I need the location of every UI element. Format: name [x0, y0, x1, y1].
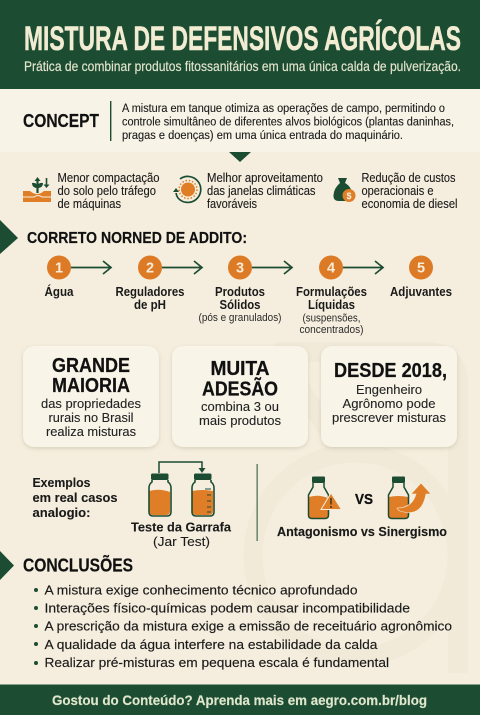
heading: order of addition: CORRETO NORNED DE ADDITO: [27, 230, 247, 247]
caption: Antagonismo vs Sinergismo [277, 524, 447, 539]
card: desde 2018 [321, 346, 457, 447]
benefit text: favoráveis [207, 196, 257, 211]
benefit text: das janelas climáticas [207, 183, 316, 198]
text: examples label: em real casos [32, 491, 118, 505]
list: conclusions [34, 582, 452, 670]
panel: concept [0, 89, 480, 152]
card: grande maioria: realiza misturas [46, 424, 136, 439]
step circles [47, 256, 433, 280]
icon: antagonism vs synergism [277, 476, 447, 539]
icon: jar test: (Jar Test) [153, 534, 210, 549]
jar two [192, 474, 214, 516]
step notes [198, 312, 364, 336]
list: conclusions: A prescrição da mistura exige a emissão de receituário agronômico [44, 618, 452, 634]
card: muita adesão: combina 3 ou [201, 399, 279, 414]
card: desde 2018: Engenheiro [356, 382, 422, 397]
list: conclusions: Realizar pré-misturas em pequena escala é fundamental [44, 655, 389, 670]
card: desde 2018: DESDE 2018, [334, 360, 447, 382]
card: grande maioria: GRANDE [52, 355, 130, 377]
step numbers [55, 260, 425, 276]
icon: money bag: $ [346, 191, 352, 201]
card: grande maioria: MAIORIA [52, 375, 130, 397]
card: muita adesão [172, 346, 308, 447]
text: examples label: analogio: [32, 506, 90, 520]
step labels [44, 284, 452, 312]
icon: jar test [131, 462, 232, 549]
concept text: pragas e doenças) em uma única entrada do maquinário. [122, 128, 403, 142]
jar one [149, 474, 171, 516]
concept text [122, 101, 454, 142]
step numbers: 4 [327, 260, 335, 276]
benefit text: de máquinas [58, 196, 121, 211]
list: conclusions: A qualidade da água interfere na estabilidade da calda [44, 637, 378, 652]
benefit text: do solo pelo tráfego [58, 183, 156, 198]
step numbers: 5 [417, 260, 425, 276]
bottle with warning [308, 476, 342, 518]
benefit text: operacionais e [362, 183, 434, 198]
card: desde 2018: Agrônomo pode [342, 396, 436, 411]
step notes: (pós e granulados) [198, 312, 282, 324]
step flow [44, 256, 452, 336]
benefit text: Redução de custos [362, 170, 456, 185]
arrows [70, 261, 383, 274]
benefit: soil compaction [23, 170, 160, 211]
icon: section marker [0, 551, 14, 580]
step notes: concentrados) [300, 324, 364, 336]
benefit text [58, 170, 160, 211]
step labels: Produtos [215, 284, 265, 299]
text: examples label: Exemplos [32, 476, 91, 490]
card: desde 2018: prescrever misturas [332, 410, 446, 425]
text: examples label [32, 476, 118, 520]
list: conclusions: A mistura exige conhecimento técnico aprofundado [44, 582, 358, 598]
step labels: Formulações [296, 284, 367, 299]
step numbers: 1 [55, 260, 63, 276]
card: grande maioria: das propriedades [41, 396, 141, 411]
footer [0, 684, 480, 715]
step labels: Adjuvantes [390, 284, 452, 299]
bottle with rising arrow [388, 476, 431, 518]
icon: section marker [0, 220, 18, 254]
arrow between jars [159, 462, 202, 473]
benefit: climate windows [173, 170, 323, 211]
heading: conclusions: CONCLUSÕES [23, 554, 133, 576]
vs label: VS [355, 491, 373, 508]
step labels: Líquidas [308, 297, 355, 312]
concept heading: CONCEPT [23, 111, 99, 131]
benefit text: Melhor aproveitamento [207, 170, 323, 185]
icon: down triangle [229, 152, 251, 162]
step labels: Reguladores [116, 284, 184, 299]
concept text: A mistura em tanque otimiza as operações de campo, permitindo o [122, 101, 445, 115]
step numbers: 3 [236, 260, 244, 276]
footer: Gostou do Conteúdo? Aprenda mais em aegro.com.br/blog [52, 692, 427, 708]
benefit text [362, 170, 458, 211]
icon: soil and plant [23, 177, 51, 202]
step notes: (suspensões, [302, 312, 360, 324]
card: muita adesão: mais produtos [199, 413, 281, 428]
card: grande maioria [23, 346, 159, 447]
step labels: Sólidos [220, 297, 260, 312]
header banner [0, 0, 480, 89]
benefit text: economia de diesel [362, 196, 458, 211]
card: grande maioria: rurais no Brasil [48, 410, 134, 425]
benefit: cost reduction [333, 170, 458, 211]
step labels: Água [44, 284, 74, 299]
step labels: de pH [134, 297, 166, 312]
icon: sun cycle [173, 176, 201, 202]
benefit text [207, 170, 323, 211]
caption: Teste da Garrafa [131, 520, 232, 534]
step numbers: 2 [146, 260, 154, 276]
card: muita adesão: ADESÃO [202, 378, 278, 400]
card: muita adesão: MUITA [210, 358, 270, 380]
list: conclusions: Interações físico-químicas podem causar incompatibilidade [44, 600, 410, 616]
benefit text: Menor compactação [58, 170, 160, 185]
